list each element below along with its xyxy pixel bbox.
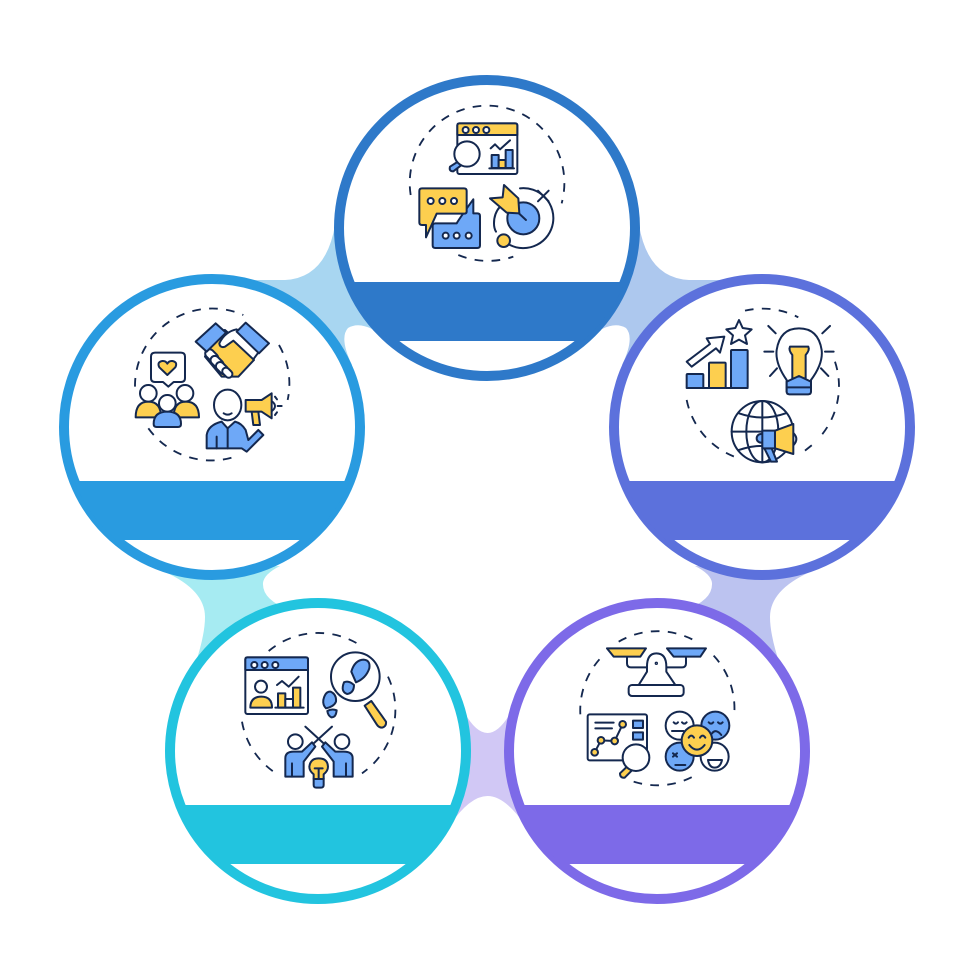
connector: bottom left to bottom right: [450, 712, 525, 825]
icon: two people with idea: [285, 727, 353, 788]
icon: browser chart: [450, 123, 517, 174]
connector: left to bottom left: [165, 566, 290, 665]
band: bottom right: [524, 805, 790, 864]
ring: bottom right: [509, 603, 805, 899]
icon: footprint magnifier: [323, 652, 386, 728]
icon: person with megaphone: [207, 390, 282, 452]
icon: handshake: [196, 323, 269, 379]
icon group: balance, data, sentiment: [580, 631, 734, 785]
ring: top: [339, 80, 635, 376]
icon group: partnership, community, promotion: [135, 309, 289, 460]
ring: bottom left: [170, 603, 466, 899]
icon: globe and megaphone: [732, 401, 796, 462]
connector: top to left: [250, 225, 400, 365]
icon: growth bars: [687, 320, 752, 388]
icon: emotion faces: [666, 712, 729, 771]
panel: right circle: [605, 279, 919, 575]
dashed ring: [580, 631, 734, 785]
icon: target and arrow: [490, 185, 553, 248]
dashed ring: [687, 309, 839, 457]
connector: right to bottom right: [685, 566, 810, 665]
connector: top to right: [574, 225, 724, 365]
dashed ring: [410, 106, 564, 261]
dashed ring: [242, 633, 395, 775]
icon: balance scale: [607, 648, 706, 696]
panel: left circle: [55, 279, 369, 575]
panel: bottom left circle: [161, 603, 475, 899]
icon: data panel with magnifier: [588, 714, 649, 778]
ring: left: [64, 279, 360, 575]
icon: light bulb: [764, 326, 834, 394]
panel: top circle: [330, 80, 644, 376]
icon group: growth, idea, global marketing: [687, 309, 839, 462]
dashed ring: [135, 309, 289, 460]
icon: chat bubbles: [419, 188, 480, 248]
icon: community with heart: [136, 353, 199, 427]
band: bottom left: [186, 805, 450, 864]
icon group: research, chat, target: [410, 106, 564, 261]
panel: bottom right circle: [500, 603, 814, 899]
band: left: [80, 481, 344, 540]
band: top: [354, 282, 620, 341]
icon group: analytics, tracking, collaboration: [242, 633, 395, 788]
band: right: [630, 481, 894, 540]
ring: right: [614, 279, 910, 575]
icon: browser profile chart: [245, 657, 308, 714]
